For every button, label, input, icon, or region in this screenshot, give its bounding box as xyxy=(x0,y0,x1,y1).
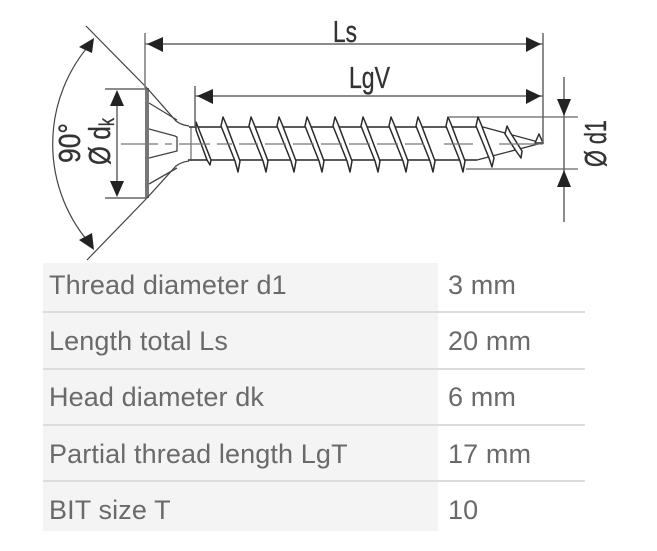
row: bit size: BIT size T xyxy=(49,495,171,525)
dimension: diameter dk: Ø d xyxy=(82,115,117,165)
dimension: diameter dk xyxy=(82,89,147,198)
dimension: diameter dk: k xyxy=(96,118,119,126)
row: bit size xyxy=(49,495,478,525)
row: length total: Length total Ls xyxy=(49,326,228,356)
screw technical drawing xyxy=(52,14,613,260)
row: thread diameter xyxy=(49,270,516,300)
centre line xyxy=(121,143,543,145)
row: length total: 20 mm xyxy=(448,326,531,356)
row: head diameter: Head diameter dk xyxy=(49,382,264,412)
screw threads xyxy=(196,117,543,172)
row: head diameter xyxy=(49,382,516,412)
dimension: LgV xyxy=(195,60,543,127)
screw head xyxy=(145,33,191,198)
row: partial thread length: Partial thread length LgT xyxy=(49,439,348,469)
row: length total xyxy=(49,326,531,356)
dimension: diameter d1: Ø d1 xyxy=(578,120,613,167)
row: partial thread length xyxy=(49,439,531,469)
dimension: diameter d1 xyxy=(557,77,613,222)
row: head diameter: 6 mm xyxy=(448,382,516,412)
row: bit size: 10 xyxy=(448,495,478,525)
dimension: LgV: LgV xyxy=(349,60,390,95)
dimension: Ls xyxy=(145,14,543,144)
angle guide lines and 90 degree arc xyxy=(53,26,147,260)
row: thread diameter: 3 mm xyxy=(448,270,516,300)
specification table xyxy=(43,263,585,531)
label: 90 degrees: 90° xyxy=(52,123,87,163)
row: thread diameter: Thread diameter d1 xyxy=(49,270,287,300)
dimension: Ls: Ls xyxy=(333,14,357,49)
screw shank xyxy=(188,117,578,169)
row: partial thread length: 17 mm xyxy=(448,439,531,469)
